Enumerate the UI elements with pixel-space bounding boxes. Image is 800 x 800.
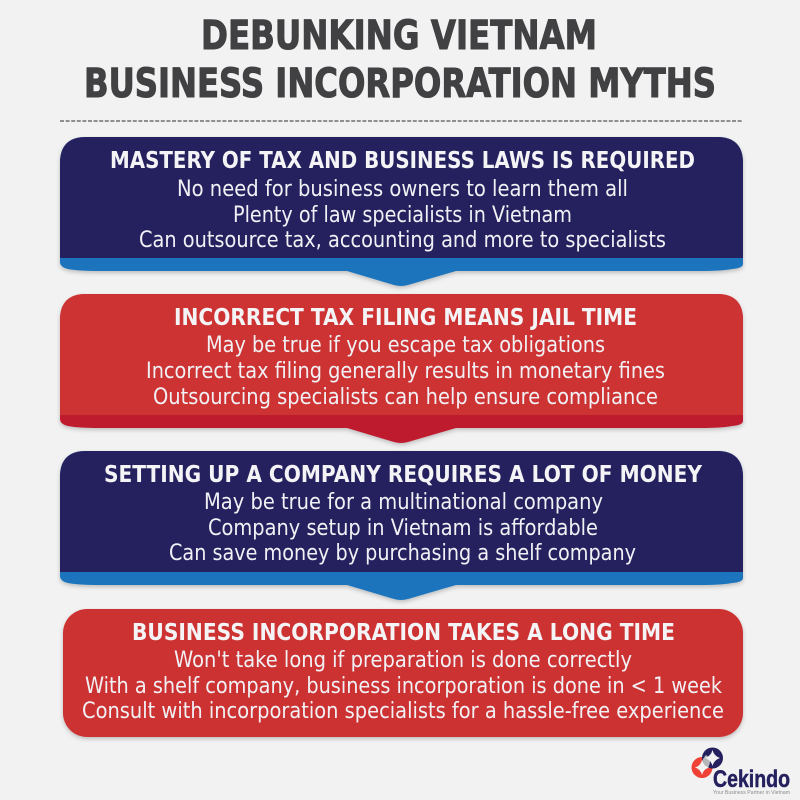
body text: Won't take long if preparation is done correctly: [174, 648, 632, 673]
icon: logo rings: [692, 748, 723, 778]
panel: mastery of tax and business laws: [60, 137, 743, 286]
body text: Company setup in Vietnam is affordable: [208, 516, 598, 541]
body text: Plenty of law specialists in Vietnam: [233, 203, 572, 228]
body text: [146, 333, 665, 410]
logo: Cekindo: [692, 748, 790, 796]
panel: setting up a company: [60, 451, 743, 600]
body text: May be true for a multinational company: [204, 490, 603, 515]
tagline: Your Business Partner in Vietnam: [713, 790, 790, 796]
body text: With a shelf company, business incorporation is done in < 1 week: [85, 674, 722, 699]
heading: MASTERY OF TAX AND BUSINESS LAWS IS REQUIRED: [110, 146, 695, 174]
panel: incorrect tax filing: [60, 294, 743, 443]
body text: Consult with incorporation specialists for a hassle-free experience: [82, 699, 724, 724]
heading: SETTING UP A COMPANY REQUIRES A LOT OF MONEY: [104, 460, 703, 488]
heading: INCORRECT TAX FILING MEANS JAIL TIME: [174, 303, 637, 331]
title: DEBUNKING VIETNAM: [201, 13, 597, 59]
body text: [82, 648, 724, 724]
body text: Can save money by purchasing a shelf company: [169, 541, 636, 566]
body text: Incorrect tax filing generally results in monetary fines: [146, 359, 665, 384]
body text: [169, 490, 636, 566]
body text: [139, 177, 666, 253]
body text: May be true if you escape tax obligations: [206, 333, 605, 358]
body text: Outsourcing specialists can help ensure compliance: [153, 385, 658, 410]
body text: No need for business owners to learn them all: [177, 177, 628, 202]
heading: BUSINESS INCORPORATION TAKES A LONG TIME: [132, 618, 675, 646]
body text: Can outsource tax, accounting and more to specialists: [139, 228, 666, 253]
panel: business incorporation time: [63, 609, 743, 737]
title: [84, 13, 716, 107]
